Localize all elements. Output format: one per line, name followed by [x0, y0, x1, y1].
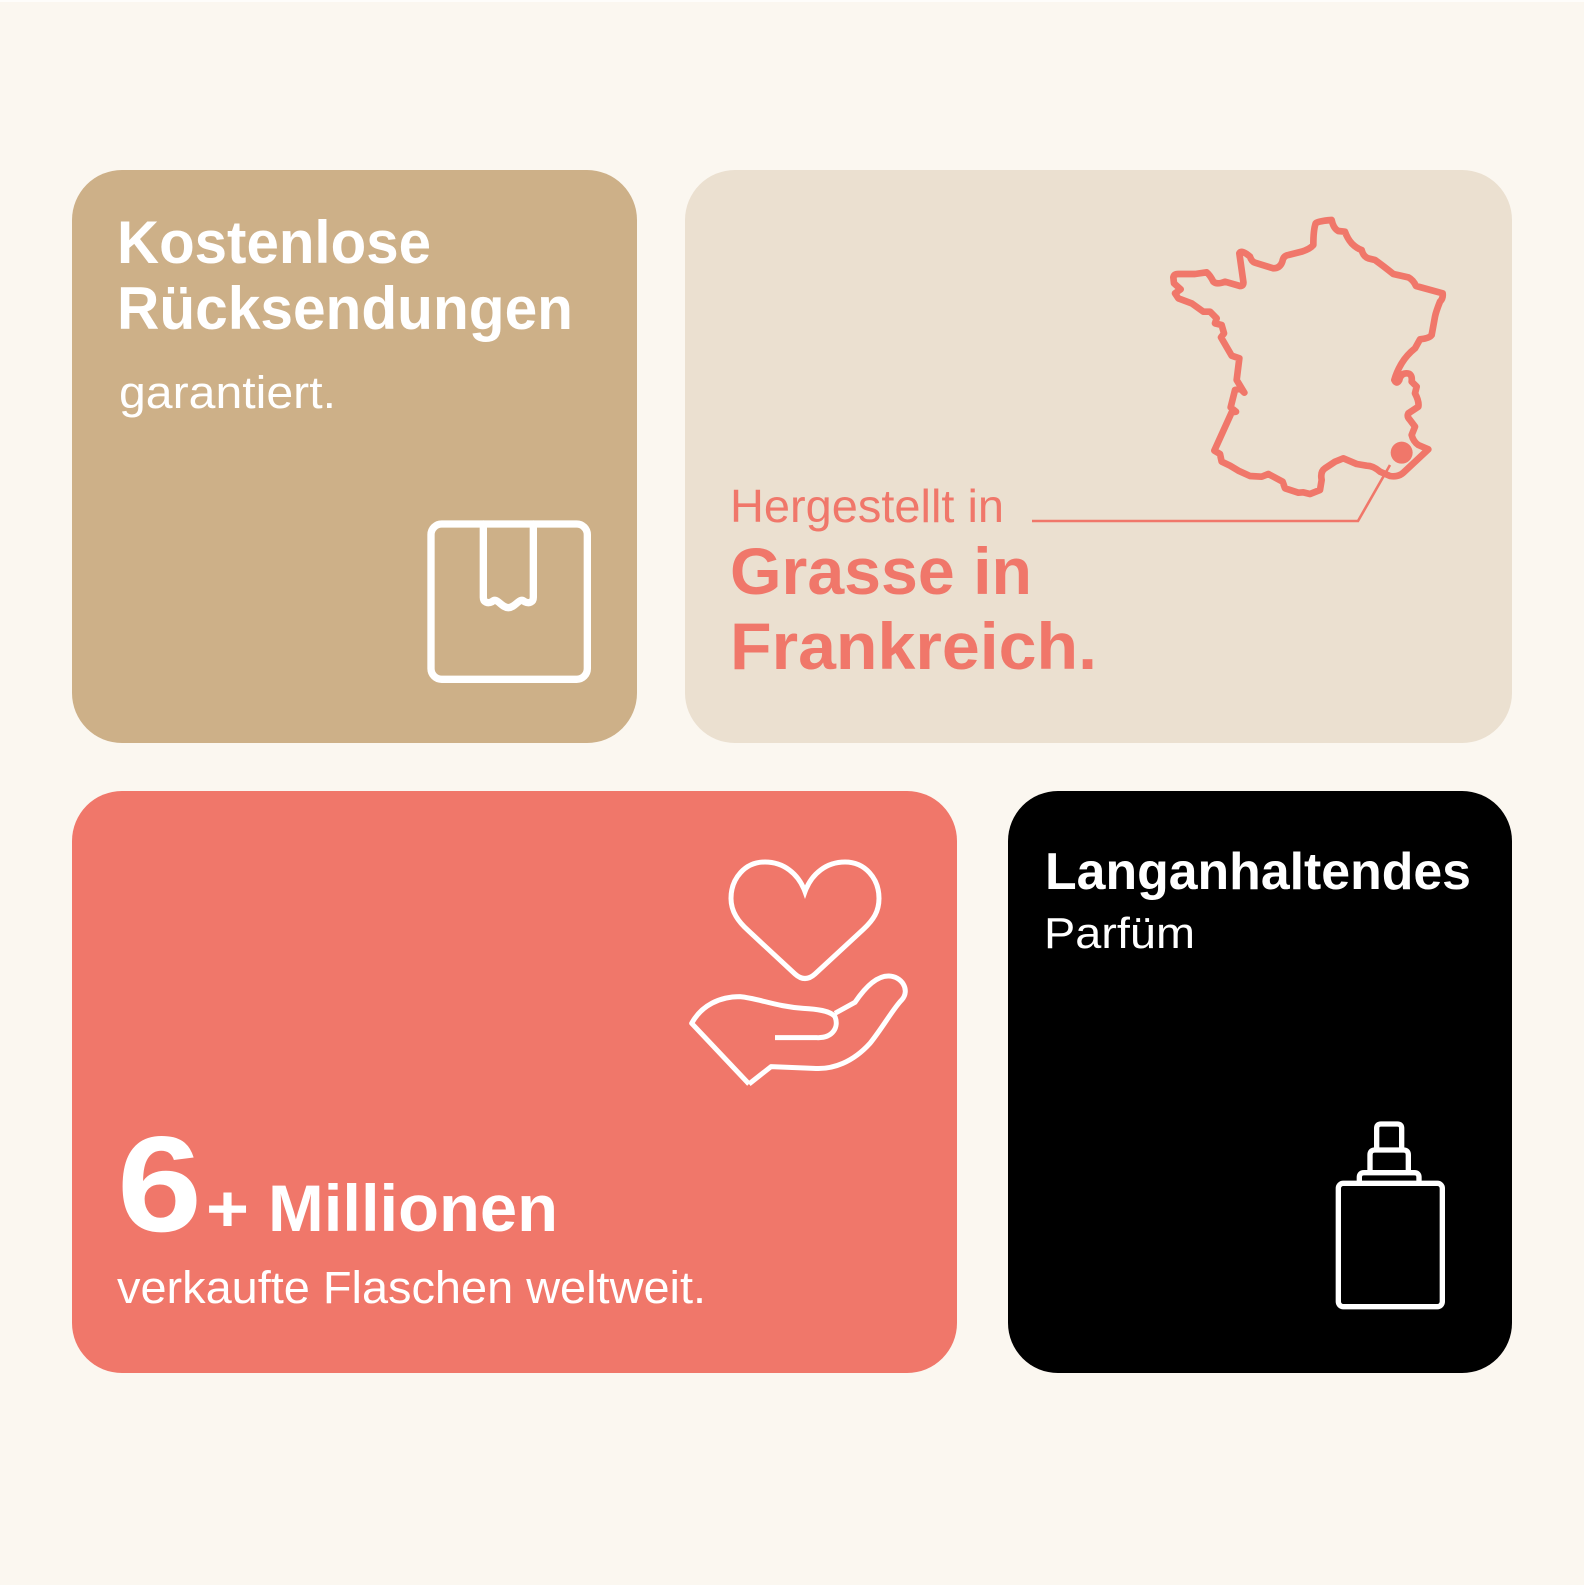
panel: long-lasting perfume	[1008, 791, 1512, 1373]
panel: free returns	[72, 170, 637, 743]
hand: fingers and wrist	[749, 976, 905, 1084]
subtext: verkaufte Flaschen weltweit: verkaufte Flaschen weltweit.	[117, 1262, 706, 1313]
location dot: Grasse	[1391, 442, 1413, 464]
panel background	[1008, 791, 1512, 1373]
plus sign: +	[206, 1171, 249, 1245]
text: Hergestellt in: Hergestellt in	[730, 480, 1004, 532]
hand	[692, 997, 836, 1084]
heading: Frankreich: Frankreich.	[730, 609, 1097, 683]
panel: made in Grasse	[685, 170, 1512, 743]
panel background	[72, 791, 957, 1373]
subtext: Parfüm: Parfüm	[1044, 909, 1195, 958]
leader line to Grasse	[1032, 465, 1390, 521]
heart	[731, 862, 879, 978]
panel background	[72, 170, 637, 743]
panel: bottles sold	[72, 791, 957, 1373]
number: 6: 6	[117, 1108, 202, 1260]
heading: Millionen: Millionen	[268, 1171, 558, 1245]
panel background	[685, 170, 1512, 743]
heading: Rücksendungen: Rücksendungen	[117, 275, 573, 342]
icon: box	[431, 524, 587, 679]
heading: Langanhaltendes: Langanhaltendes	[1045, 843, 1471, 901]
map: France outline	[1173, 220, 1443, 494]
icon: heart in hand	[692, 862, 905, 1084]
icon: perfume bottle	[1338, 1124, 1442, 1307]
heading: Grasse in: Grasse in	[730, 534, 1032, 608]
subtext: garantiert: garantiert.	[119, 367, 336, 418]
heading: Kostenlose: Kostenlose	[117, 209, 431, 276]
